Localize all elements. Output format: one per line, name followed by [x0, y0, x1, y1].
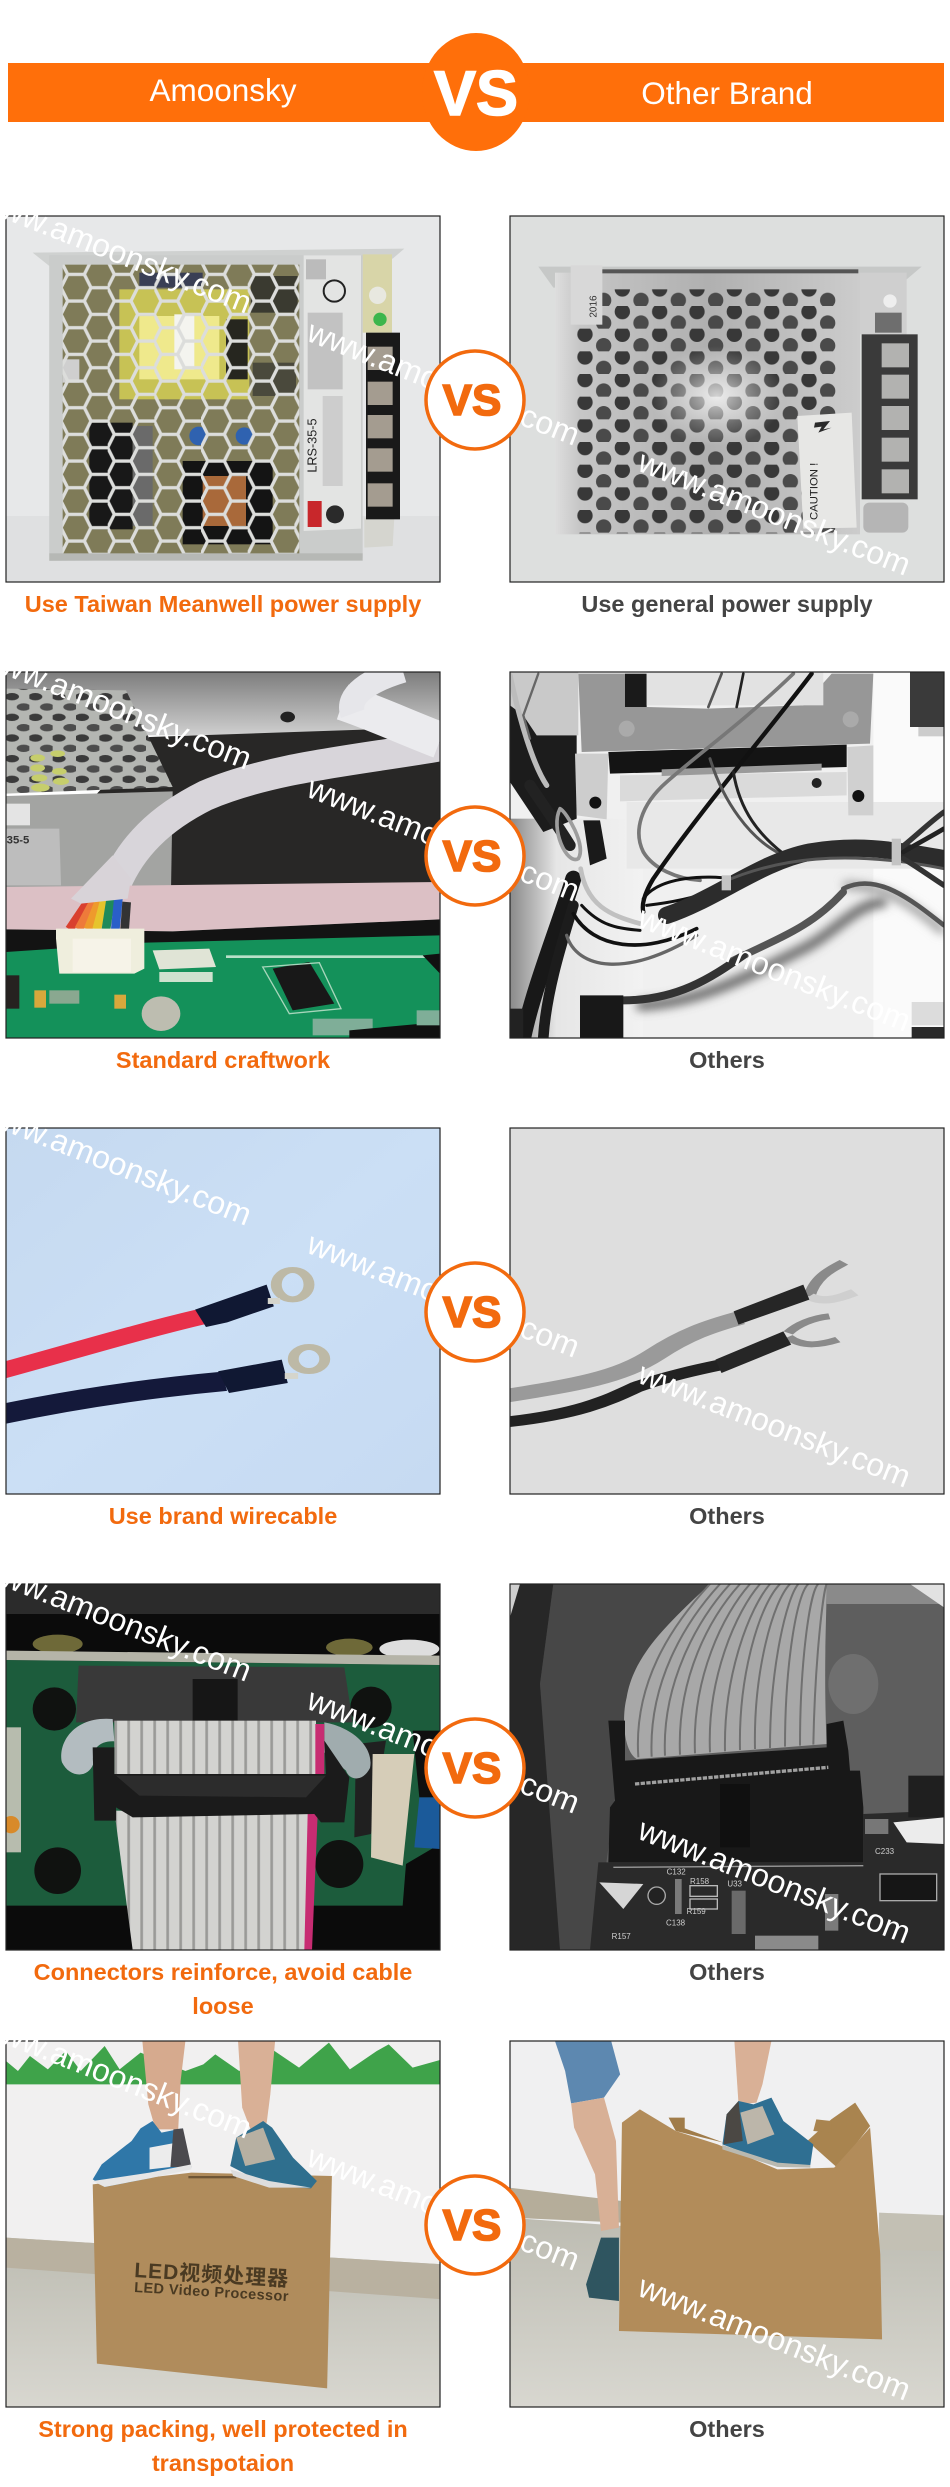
photo: Meanwell power supply: LRS-35-5	[306, 418, 320, 473]
watermarks: www.amoonsky.com	[302, 1225, 585, 1365]
caption: Amoonsky: Connectors reinforce, avoid cable	[34, 1959, 412, 1985]
watermarks: www.amoonsky.com	[633, 443, 916, 583]
photo: crushed packing	[510, 2041, 950, 2407]
photo: strong packing	[6, 2041, 443, 2407]
watermarks: www.amoonsky.com	[633, 2268, 916, 2408]
watermarks: www.amoonsky.com	[302, 769, 585, 909]
brand name: Amoonsky: Amoonsky	[149, 72, 297, 108]
caption: Amoonsky: loose	[192, 1993, 254, 2019]
watermarks: www.amoonsky.com	[633, 899, 916, 1039]
watermarks: www.amoonsky.com	[302, 2138, 585, 2278]
photo: generic power supply: CAUTION !	[808, 463, 820, 520]
caption: Amoonsky: transpotaion	[152, 2450, 294, 2476]
row 1: power supply comparison	[0, 181, 944, 617]
watermarks: www.amoonsky.com	[633, 1355, 916, 1495]
photo: generic power supply: 2016	[589, 295, 600, 318]
caption: other: Others	[689, 1503, 765, 1529]
row 3: wire cable comparison	[0, 1093, 945, 1529]
row 4: connector comparison	[0, 1549, 944, 2019]
brand name: Other Brand: Other Brand	[641, 75, 813, 111]
photo: other connector: R157	[612, 1932, 631, 1941]
photo: tidy wiring: 35-5	[7, 835, 29, 847]
box print: English product name: LED Video Processor	[134, 2280, 289, 2305]
photo: other connector: C132	[667, 1868, 686, 1877]
watermarks: www.amoonsky.com	[302, 1681, 585, 1821]
box print: Chinese product name: LED视频处理器	[134, 2259, 290, 2291]
caption: other: Others	[689, 2416, 765, 2442]
vs badge: VS	[443, 832, 501, 881]
vs badge: VS	[443, 1288, 501, 1337]
watermarks: www.amoonsky.com	[302, 313, 585, 453]
photo frames	[6, 2041, 944, 2407]
photo frames	[6, 1128, 944, 1494]
photo: tidy wiring	[6, 670, 440, 1038]
photo: brand wire cable	[0, 1128, 441, 1494]
photo: other connector: C138	[666, 1919, 686, 1928]
vs badge: VS	[443, 1744, 501, 1793]
caption: Amoonsky: Use Taiwan Meanwell power supply	[25, 591, 421, 617]
photo: generic power supply	[510, 216, 944, 582]
photo: other connector: R159	[687, 1907, 706, 1916]
photo: other connector	[510, 1584, 944, 1950]
watermarks	[0, 637, 916, 1039]
photo: other connector: U33	[727, 1880, 743, 1889]
row 5: packing comparison	[0, 2006, 950, 2476]
photo frames	[6, 672, 944, 1038]
photo: messy wiring	[510, 672, 944, 1038]
watermarks	[0, 181, 916, 583]
watermarks	[0, 2006, 916, 2408]
photo: other connector: C233	[875, 1847, 895, 1856]
caption: other: Others	[689, 1047, 765, 1073]
photo: other connector: R158	[690, 1877, 710, 1886]
vs badge	[426, 2176, 524, 2274]
header vs text: VS	[434, 59, 518, 129]
vs badge: VS	[443, 2201, 501, 2250]
watermarks: www.amoonsky.com	[633, 1811, 916, 1951]
photo: reinforced connector	[2, 1584, 440, 1950]
vs badge	[426, 351, 524, 449]
watermarks	[0, 1093, 916, 1495]
vs badge	[426, 1263, 524, 1361]
photo frames	[6, 216, 944, 582]
caption: Amoonsky: Standard craftwork	[116, 1047, 331, 1073]
caption: other: Others	[689, 1959, 765, 1985]
vs badge	[426, 1719, 524, 1817]
watermarks	[0, 1549, 916, 1951]
header vs badge	[422, 33, 530, 151]
photo: other wire cable	[503, 1128, 945, 1494]
caption: other: Use general power supply	[581, 591, 873, 617]
caption: Amoonsky: Use brand wirecable	[109, 1503, 337, 1529]
vs badge: VS	[443, 376, 501, 425]
row 2: craftwork comparison	[0, 637, 944, 1073]
photo: Meanwell power supply	[6, 216, 440, 582]
header banner	[8, 33, 944, 151]
photo frames	[6, 1584, 944, 1950]
vs badge	[426, 807, 524, 905]
caption: Amoonsky: Strong packing, well protected in	[38, 2416, 408, 2442]
